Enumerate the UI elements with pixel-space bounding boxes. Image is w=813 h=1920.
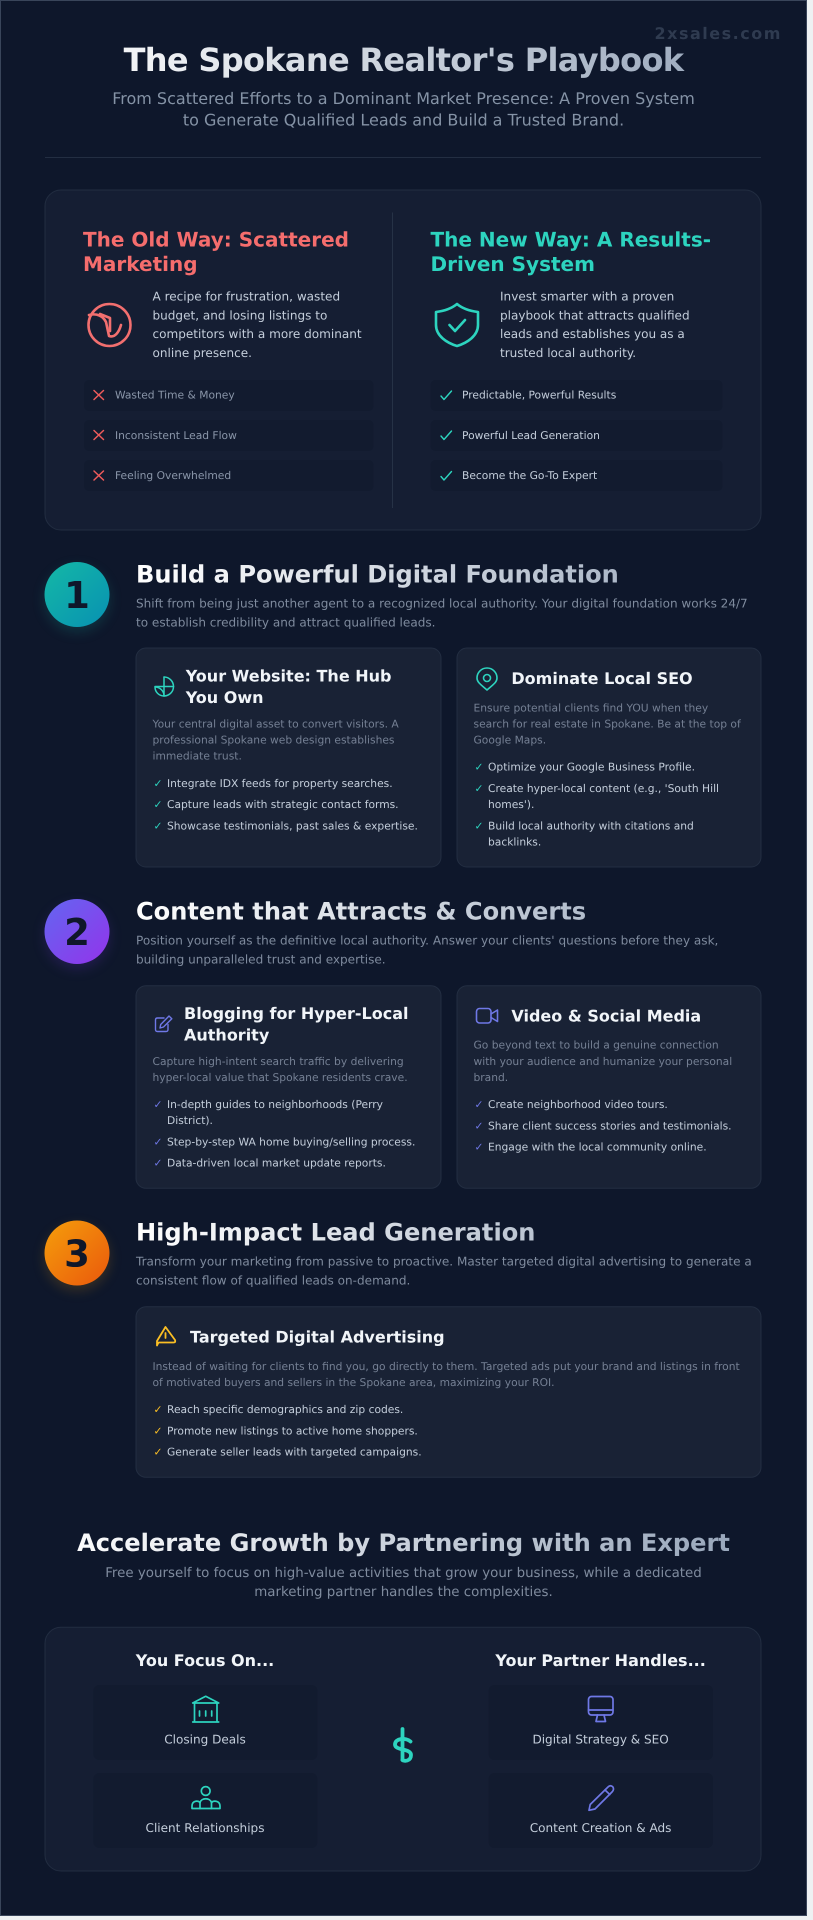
card text: hyper-local value that Spokane residents crave. <box>152 1071 408 1084</box>
card heading: Targeted Digital Advertising <box>190 1328 445 1347</box>
icon: dollar sign <box>395 1729 411 1761</box>
card text <box>474 1039 732 1084</box>
card text: search for real estate in Spokane. Be at the top of <box>474 718 741 730</box>
card text <box>152 1055 408 1084</box>
heading: new way <box>430 228 711 276</box>
checklist: Reach specific demographics and zip codes. <box>167 1403 403 1416</box>
checklist: ✓ <box>474 1098 483 1111</box>
card: targeted advertising <box>136 1307 761 1477</box>
column: the new way <box>430 228 722 491</box>
subtitle: From Scattered Efforts to a Dominant Market Presence: A Proven System <box>112 89 695 108</box>
list item: inconsistent lead flow <box>84 420 374 451</box>
section description <box>136 934 718 966</box>
checklist: Build local authority with citations and <box>488 820 694 833</box>
checklist: Generate seller leads with targeted campaigns. <box>167 1446 422 1459</box>
list item: feeling overwhelmed <box>84 460 374 491</box>
tile: client relationships: Client Relationships <box>146 1821 264 1835</box>
card text: Instead of waiting for clients to find you, go directly to them. Targeted ads put your brand and listings in front <box>152 1360 740 1373</box>
list item: predictable results: Predictable, Powerful Results <box>462 388 617 402</box>
list item: predictable results <box>430 380 722 411</box>
subtitle <box>112 89 695 130</box>
panel: old way vs new way <box>45 190 761 530</box>
card: your website <box>136 648 441 867</box>
text: old way description <box>152 290 362 360</box>
card text: Capture high-intent search traffic by delivering <box>152 1055 404 1068</box>
icon: edit <box>156 1016 172 1032</box>
header <box>112 41 695 130</box>
checklist: Integrate IDX feeds for property searches. <box>167 777 393 790</box>
checklist: In-depth guides to neighborhoods (Perry <box>167 1098 383 1111</box>
card text <box>152 1360 740 1389</box>
section 4: partner <box>45 1529 761 1871</box>
checklist: Create neighborhood video tours. <box>488 1098 668 1111</box>
number badge 2: 2 <box>64 911 90 954</box>
section heading: Content that Attracts & Converts <box>136 898 586 926</box>
checklist: homes'). <box>488 798 534 811</box>
checklist: ✓ <box>154 777 162 790</box>
checklist: ✓ <box>474 1141 483 1154</box>
text: new way description: trusted local authority. <box>500 346 636 360</box>
text: old way description: online presence. <box>152 346 252 360</box>
card heading: You Own <box>185 688 264 707</box>
card text: with your audience and humanize your personal <box>474 1055 732 1068</box>
checklist: ✓ <box>474 782 483 795</box>
column heading: you focus on: You Focus On... <box>135 1651 274 1670</box>
heading: old way: Marketing <box>83 252 198 276</box>
list item: go-to expert <box>430 460 722 491</box>
section description: Position yourself as the definitive local authority. Answer your clients' questions before they ask, <box>136 934 718 948</box>
section heading: High-Impact Lead Generation <box>136 1219 535 1247</box>
text: old way description: A recipe for frustration, wasted <box>152 290 340 304</box>
heading: new way: The New Way: A Results- <box>430 228 711 252</box>
section heading: Build a Powerful Digital Foundation <box>136 560 619 588</box>
card heading: Dominate Local SEO <box>511 669 693 688</box>
card heading: Your Website: The Hub <box>185 667 391 686</box>
section description: Transform your marketing from passive to proactive. Master targeted digital advertising to generate a <box>135 1255 752 1269</box>
tile: digital strategy: Digital Strategy & SEO <box>532 1732 669 1746</box>
icon: trending down circle <box>88 304 130 346</box>
watermark: 2xsales.com <box>654 24 782 43</box>
heading: old way <box>83 228 349 276</box>
checklist: ✓ <box>154 1403 162 1416</box>
list item: lead generation <box>430 420 722 451</box>
number badge 1: 1 <box>64 574 90 617</box>
checklist: ✓ <box>154 1098 162 1111</box>
checklist: ✓ <box>474 820 483 833</box>
icon: shield check <box>436 304 478 346</box>
card text: immediate trust. <box>152 750 242 763</box>
text: new way description <box>500 290 690 360</box>
text: old way description: budget, and losing listings to <box>152 308 327 322</box>
card text: Google Maps. <box>474 734 546 746</box>
panel: partnership <box>45 1627 761 1871</box>
heading: old way: The Old Way: Scattered <box>83 228 349 252</box>
card text: Ensure potential clients find YOU when they <box>474 701 708 714</box>
section description: to establish credibility and attract qualified leads. <box>136 615 435 629</box>
checklist: Share client success stories and testimonials. <box>488 1119 732 1132</box>
icon: globe leaf <box>155 677 174 696</box>
section 3: lead generation <box>44 1219 761 1477</box>
card heading: Video & Social Media <box>511 1006 701 1025</box>
checklist: backlinks. <box>488 836 541 849</box>
section description: marketing partner handles the complexities. <box>254 1585 553 1600</box>
checklist: ✓ <box>154 798 162 811</box>
checklist: ✓ <box>474 1119 483 1132</box>
column heading: your partner handles: Your Partner Handles... <box>494 1651 706 1670</box>
checklist: Create hyper-local content (e.g., 'South Hill <box>488 782 719 795</box>
card: video and social <box>457 986 761 1188</box>
checklist <box>154 777 418 833</box>
checklist: Data-driven local market update reports. <box>167 1157 386 1170</box>
card text: Your central digital asset to convert visitors. A <box>152 718 399 731</box>
section 2: content <box>44 898 761 1188</box>
list item: go-to expert: Become the Go-To Expert <box>462 469 597 482</box>
section description <box>136 596 748 629</box>
number badge 3: 3 <box>64 1232 90 1276</box>
icon: map pin <box>477 668 497 690</box>
list item: inconsistent lead flow: Inconsistent Lead Flow <box>115 429 237 442</box>
tile: digital strategy <box>489 1685 713 1760</box>
section description: Shift from being just another agent to a recognized local authority. Your digital foundation works 24/7 <box>136 596 748 610</box>
card text: brand. <box>474 1071 508 1084</box>
card text <box>152 718 399 763</box>
card text: of motivated buyers and sellers in the Spokane area, maximizing your ROI. <box>152 1376 555 1389</box>
text: new way description: leads and establishes you as a <box>500 327 685 341</box>
card text: Go beyond text to build a genuine connection <box>474 1039 719 1052</box>
checklist <box>474 1098 732 1154</box>
checklist: ✓ <box>154 1135 162 1148</box>
section description <box>135 1255 752 1288</box>
checklist <box>474 761 719 849</box>
card heading: Blogging for Hyper-Local <box>184 1004 408 1023</box>
checklist: District). <box>167 1114 213 1127</box>
checklist: ✓ <box>154 1446 162 1459</box>
checklist: ✓ <box>474 761 483 774</box>
tile: closing deals: Closing Deals <box>164 1732 246 1746</box>
list item: lead generation: Powerful Lead Generation <box>462 429 600 442</box>
checklist <box>154 1098 415 1170</box>
card text <box>474 701 741 746</box>
section description: consistent flow of qualified leads on-demand. <box>136 1274 410 1288</box>
checklist: ✓ <box>154 1157 162 1170</box>
heading: new way: Driven System <box>430 252 595 276</box>
section 1: digital foundation <box>44 560 761 867</box>
card heading: Authority <box>184 1025 270 1044</box>
text: old way description: competitors with a more dominant <box>152 327 362 341</box>
text: new way description: Invest smarter with a proven <box>500 290 674 304</box>
section heading: Accelerate Growth by Partnering with an Expert <box>77 1529 730 1557</box>
title: The Spokane Realtor's Playbook <box>124 41 685 79</box>
checklist: Step-by-step WA home buying/selling process. <box>167 1135 415 1148</box>
section description <box>105 1566 702 1600</box>
checklist: Showcase testimonials, past sales & expertise. <box>167 820 418 833</box>
list item: wasted time and money: Wasted Time & Money <box>115 388 235 402</box>
icon: video camera <box>476 1008 498 1023</box>
icon: warning triangle <box>157 1327 175 1346</box>
column: the old way <box>83 228 374 491</box>
tile: content creation: Content Creation & Ads <box>530 1821 671 1835</box>
list item: wasted time and money <box>84 380 374 411</box>
number badge 1 <box>44 562 110 627</box>
tile: content creation <box>489 1773 713 1848</box>
checklist: Optimize your Google Business Profile. <box>488 761 695 774</box>
subtitle: to Generate Qualified Leads and Build a Trusted Brand. <box>183 110 624 130</box>
list item: feeling overwhelmed: Feeling Overwhelmed <box>115 469 231 482</box>
tile: closing deals <box>93 1685 317 1760</box>
checklist: Engage with the local community online. <box>488 1141 707 1154</box>
number badge 2 <box>44 899 110 964</box>
card heading <box>185 667 391 707</box>
card: blogging <box>136 986 441 1188</box>
checklist: Promote new listings to active home shoppers. <box>167 1424 418 1437</box>
card: local seo <box>457 648 761 867</box>
text: new way description: playbook that attracts qualified <box>500 308 690 322</box>
section description: building unparalleled trust and expertise. <box>136 952 386 966</box>
section description: Free yourself to focus on high-value activities that grow your business, while a dedicated <box>105 1566 702 1581</box>
number badge 3 <box>44 1220 110 1286</box>
card text: professional Spokane web design establishes <box>152 734 395 747</box>
checklist <box>154 1403 422 1459</box>
checklist: ✓ <box>154 820 162 833</box>
card heading <box>184 1004 408 1044</box>
checklist: ✓ <box>154 1424 162 1437</box>
checklist: Capture leads with strategic contact forms. <box>167 798 399 811</box>
tile: client relationships <box>93 1773 317 1848</box>
